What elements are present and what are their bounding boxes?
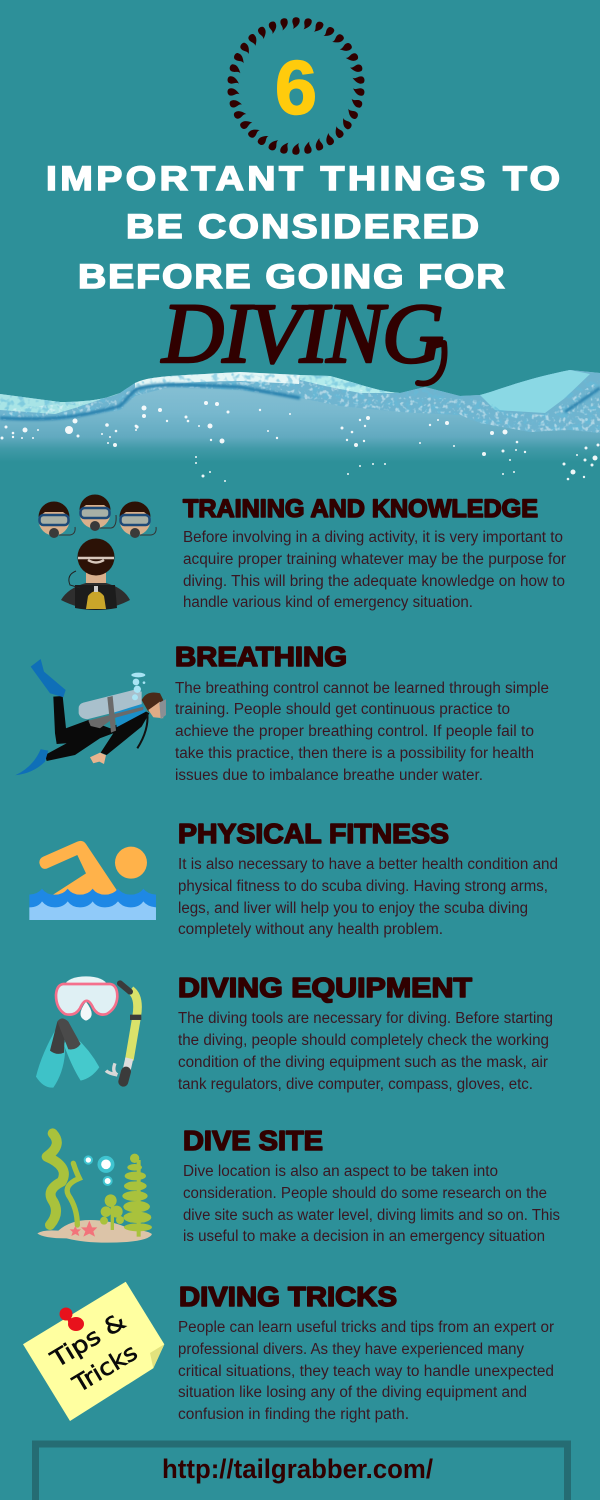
heading: TRAINING AND KNOWLEDGE <box>183 495 538 523</box>
mask <box>65 976 107 994</box>
arm and body <box>39 841 117 897</box>
body text: achieve the proper breathing control. If people fail to <box>175 723 534 740</box>
body text <box>183 529 566 611</box>
badge: number 6 in drop ring <box>227 17 365 155</box>
dark wave line <box>0 385 300 419</box>
note text: Tricks <box>68 1340 142 1399</box>
icon: swimmer <box>29 841 156 920</box>
body text: legs, and liver will help you to enjoy the scuba diving <box>178 900 528 917</box>
dark wave <box>29 889 156 910</box>
body text: Before involving in a diving activity, it is very important to <box>183 529 563 546</box>
body text: take this practice, then there is a possibility for health <box>175 745 534 762</box>
wetsuit <box>45 696 149 761</box>
body text: diving. This will bring the adequate knowledge on how to <box>183 573 565 590</box>
body text: dive site such as water level, diving limits and so on. This <box>183 1207 560 1224</box>
bottom fin <box>15 749 48 775</box>
water body <box>0 370 600 462</box>
top fin <box>31 659 66 697</box>
harness <box>88 696 143 733</box>
body text: critical situations, they teach way to handle unexpected <box>178 1363 554 1380</box>
sand <box>37 1220 152 1243</box>
title <box>46 159 560 295</box>
body text: People can learn useful tricks and tips from an expert or <box>178 1319 554 1336</box>
short seaweed <box>67 1163 79 1225</box>
body text <box>175 680 549 784</box>
body text: issues due to imbalance breathe under water. <box>175 767 483 784</box>
middle face <box>80 494 116 531</box>
body text: Dive location is also an aspect to be taken into <box>183 1163 498 1180</box>
icon: mask, fins and snorkel <box>36 976 141 1088</box>
heading word: DIVING: DIVING <box>161 285 444 381</box>
panel: training and knowledge <box>38 494 566 611</box>
body text: is useful to make a decision in an emergency situation <box>183 1228 545 1245</box>
small plant <box>100 1194 124 1230</box>
panel: physical fitness <box>29 818 558 938</box>
snorkel <box>129 990 138 1060</box>
footer url: http://tailgrabber.com/ <box>162 1454 433 1484</box>
body text: physical fitness to do scuba diving. Having strong arms, <box>178 878 548 895</box>
left face <box>38 502 75 538</box>
icon: sticky note <box>23 1282 164 1421</box>
body text: professional divers. As they have experienced many <box>178 1341 524 1358</box>
head <box>142 692 163 712</box>
light wave <box>29 901 156 920</box>
body text: the diving, people should completely check the working <box>178 1032 549 1049</box>
footer frame <box>36 1444 568 1500</box>
heading: DIVE SITE <box>183 1125 323 1156</box>
right face <box>120 502 156 538</box>
heading: BREATHING <box>175 641 347 672</box>
body text: confusion in finding the right path. <box>178 1406 409 1423</box>
body text: consideration. People should do some research on the <box>183 1185 547 1202</box>
heading: PHYSICAL FITNESS <box>178 818 449 849</box>
body text: completely without any health problem. <box>178 921 443 938</box>
title: BEFORE GOING FOR <box>78 257 505 295</box>
number 6: 6 <box>275 46 317 131</box>
body text: tank regulators, dive computer, compass, gloves, etc. <box>178 1076 533 1093</box>
note fold <box>150 1344 164 1368</box>
body text <box>178 1319 554 1423</box>
head <box>115 847 147 879</box>
body text: training. People should get continuous practice to <box>175 701 510 718</box>
foam texture <box>0 372 600 433</box>
title: BE CONSIDERED <box>126 207 479 245</box>
icon: divers <box>38 494 156 610</box>
bubbles <box>131 673 145 700</box>
red pin <box>60 1308 84 1331</box>
body text: It is also necessary to have a better health condition and <box>178 856 558 873</box>
note text <box>46 1309 142 1399</box>
icon: seaweed and seabed <box>37 1133 152 1243</box>
body text <box>183 1163 560 1245</box>
ring of drops <box>227 17 365 155</box>
icon: scuba diver <box>15 659 166 775</box>
title: IMPORTANT THINGS TO <box>46 159 560 197</box>
panel: diving equipment <box>36 972 553 1093</box>
hand <box>90 753 106 764</box>
left fin <box>36 1027 65 1088</box>
note text: Tips & <box>46 1309 130 1374</box>
panel: breathing <box>15 641 549 784</box>
tall seaweed <box>47 1133 64 1225</box>
body text: The diving tools are necessary for diving. Before starting <box>178 1010 553 1027</box>
body text: condition of the diving equipment such as the mask, air <box>178 1054 548 1071</box>
tall plant <box>122 1154 152 1237</box>
body text: situation like losing any of the diving equipment and <box>178 1384 527 1401</box>
heading: DIVING EQUIPMENT <box>178 972 472 1003</box>
panel: diving tricks <box>23 1281 554 1423</box>
bubbles <box>85 1156 113 1185</box>
body text: The breathing control cannot be learned through simple <box>175 680 549 697</box>
body text <box>178 856 558 938</box>
tank <box>79 690 142 719</box>
heading: DIVING TRICKS <box>179 1281 397 1312</box>
right fin <box>63 1037 99 1081</box>
note paper <box>23 1282 164 1421</box>
foam band <box>0 370 600 433</box>
starfish <box>70 1221 97 1237</box>
panel: dive site <box>37 1125 560 1245</box>
body text <box>178 1010 553 1093</box>
body text: acquire proper training whatever may be the purpose for <box>183 551 566 568</box>
light aqua patches <box>0 393 120 414</box>
bubbles <box>0 401 600 482</box>
vest <box>115 704 146 727</box>
main diver back view <box>61 538 130 610</box>
body text: handle various kind of emergency situation. <box>183 594 473 611</box>
foot pockets <box>50 1021 65 1054</box>
water wave band <box>0 370 600 482</box>
